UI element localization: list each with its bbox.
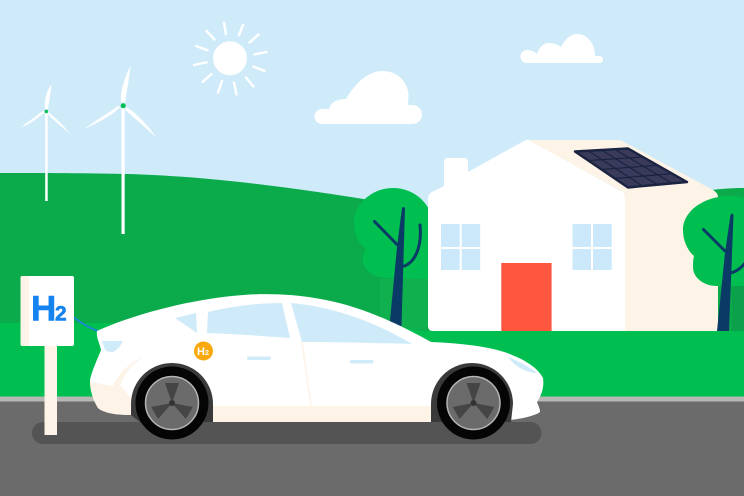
road surface bbox=[0, 402, 744, 496]
car bbox=[90, 294, 543, 440]
shrub under right tree bbox=[732, 286, 744, 331]
car body bbox=[90, 294, 543, 422]
car windshield window bbox=[291, 303, 412, 344]
lower shrub band bbox=[380, 279, 432, 329]
hydrogen sign bbox=[20, 276, 74, 435]
door bbox=[501, 263, 552, 331]
car quarter window bbox=[175, 313, 197, 333]
car tail light bbox=[102, 341, 123, 352]
sign label: H bbox=[31, 290, 56, 329]
hydrogen badge: H2 bbox=[197, 346, 209, 358]
car headlight bbox=[508, 357, 537, 373]
road bbox=[0, 396, 744, 496]
cloud: small bbox=[520, 34, 603, 63]
tree canopy bbox=[354, 188, 432, 279]
front wheel bbox=[431, 363, 513, 440]
icon: sun bbox=[194, 23, 266, 94]
car cream sill bbox=[213, 406, 432, 422]
ground: bright green bbox=[0, 323, 744, 398]
car fender highlight bbox=[113, 357, 143, 386]
door handles bbox=[247, 356, 374, 364]
wind turbine: large bbox=[84, 66, 156, 234]
rear wheel bbox=[131, 363, 213, 440]
road kerb bbox=[0, 396, 744, 402]
house front bbox=[428, 140, 625, 331]
sign label: 2 bbox=[55, 303, 67, 326]
car cream rear panel bbox=[90, 382, 132, 415]
house bbox=[428, 140, 718, 331]
hill: far dark green bbox=[0, 173, 440, 335]
hydrogen badge bbox=[194, 342, 213, 360]
sign board bbox=[20, 276, 74, 346]
door seam bbox=[302, 342, 311, 406]
tree: left bbox=[354, 188, 432, 329]
window: right bbox=[572, 224, 612, 270]
charging cable bbox=[74, 318, 99, 332]
car shadow bbox=[32, 422, 542, 444]
window: left bbox=[441, 224, 480, 270]
car rear side window bbox=[207, 303, 290, 338]
cloud: large bbox=[314, 71, 422, 124]
tree trunk bbox=[374, 207, 420, 326]
hill: far right bbox=[700, 188, 744, 335]
house side wall bbox=[527, 140, 718, 331]
solar panel bbox=[575, 148, 687, 188]
wind turbine: small bbox=[20, 84, 70, 201]
tree trunk bbox=[704, 214, 744, 331]
tree: right bbox=[683, 196, 744, 331]
tree canopy bbox=[683, 196, 744, 286]
sign post bbox=[44, 344, 57, 435]
